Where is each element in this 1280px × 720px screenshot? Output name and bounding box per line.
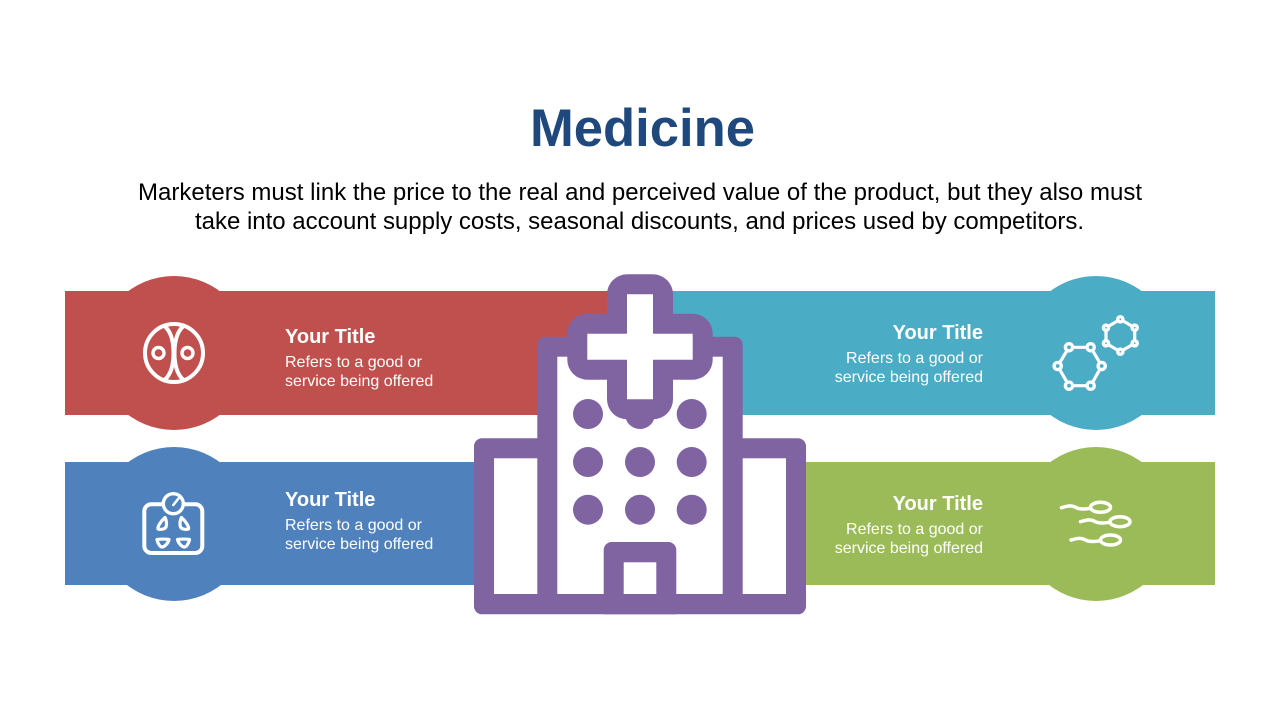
text: green panel: Refers to a good or: [846, 521, 984, 538]
text: green panel: service being offered: [835, 540, 983, 557]
subtitle text block: Marketers must link the price to the real and perceived value of the product, but they also must: [138, 179, 1142, 206]
text: green panel: Your Title: [893, 493, 983, 515]
text: blue panel: Refers to a good or: [285, 517, 423, 534]
subtitle text block: take into account supply costs, seasonal discounts, and prices used by competitors.: [195, 208, 1084, 235]
title: Medicine: [530, 99, 755, 158]
panel: blue bottom-left: [65, 447, 640, 601]
text: teal panel: [835, 322, 984, 386]
hospital outer silhouette: [474, 337, 806, 614]
hospital door: [604, 542, 676, 614]
text: red panel: Your Title: [285, 326, 375, 348]
text: teal panel: Your Title: [893, 322, 983, 344]
text: blue panel: [285, 489, 433, 553]
icon: sperm cells: [1062, 502, 1130, 545]
icon: hospital building: [474, 294, 806, 614]
panel: green bottom-right: [640, 447, 1215, 601]
text: teal panel: service being offered: [835, 369, 983, 386]
icon: molecules: [1054, 317, 1137, 389]
text: red panel: [285, 326, 433, 390]
text: blue panel: Your Title: [285, 489, 375, 511]
text: green panel: [835, 493, 984, 557]
hospital window dots: [573, 399, 707, 525]
panel: teal top-right: [640, 276, 1215, 430]
hospital windows and wings: [494, 357, 786, 594]
text: blue panel: service being offered: [285, 536, 433, 553]
subtitle text block: [138, 179, 1142, 235]
text: teal panel: Refers to a good or: [846, 350, 984, 367]
medical cross: [587, 294, 693, 399]
text: red panel: service being offered: [285, 373, 433, 390]
icon: weighing scale: [144, 494, 202, 553]
icon: kidneys in circle: [145, 324, 203, 382]
panel: red top-left: [65, 276, 640, 430]
text: red panel: Refers to a good or: [285, 354, 423, 371]
